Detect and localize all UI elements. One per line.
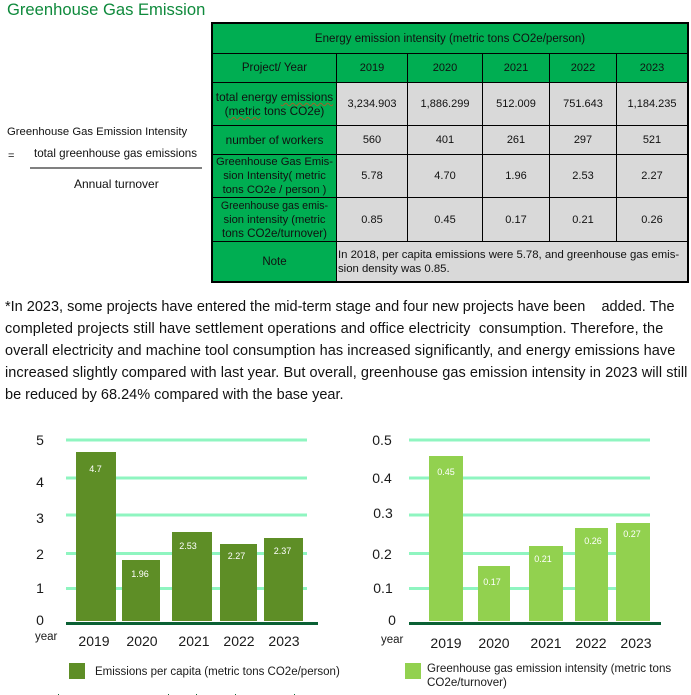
bar chart: emission intensity (372, 432, 671, 689)
y axis labels (372, 432, 396, 628)
emissions table (211, 22, 689, 283)
row: number of workers: 297 (574, 134, 592, 146)
bar value labels: 0.26 (584, 536, 602, 546)
row: total energy emissions: 1,886.299 (421, 98, 469, 110)
header row: 2023 (640, 62, 664, 74)
row: intensity per turnover: sion intensity (metric (224, 214, 325, 226)
row: total energy emissions: 751.643 (563, 98, 603, 110)
bar value labels: 2.37 (274, 546, 291, 556)
legend: Emissions per capita (metric tons CO2e/person) (95, 666, 340, 678)
y axis labels: 3 (36, 510, 44, 526)
title: Greenhouse Gas Emission (7, 0, 205, 19)
bar chart: emissions per capita (35, 432, 340, 695)
explanatory paragraph: increased slightly compared with last year. But overall, greenhouse gas emission intensity in 2023 will still (5, 365, 687, 381)
bar value labels: 4.7 (89, 464, 102, 474)
row: number of workers: 521 (643, 134, 661, 146)
denominator: Annual turnover (74, 177, 159, 191)
row: note (213, 242, 687, 281)
formula label: Greenhouse Gas Emission Intensity (7, 126, 187, 138)
gridlines (66, 438, 307, 590)
row: number of workers: 261 (507, 134, 525, 146)
formula (7, 126, 202, 191)
row: intensity per person: 1.96 (505, 170, 527, 182)
row: note: In 2018, per capita emissions were 5.78, and greenhouse gas emis- (338, 248, 679, 260)
x axis labels: 2019 (78, 633, 110, 649)
x axis labels: 2023 (268, 633, 300, 649)
row: number of workers: 560 (363, 134, 381, 146)
y axis labels: 5 (36, 432, 44, 448)
row: intensity per person: 2.53 (572, 170, 594, 182)
bars (76, 452, 303, 621)
x axis labels: 2023 (620, 635, 652, 651)
bar value labels: 0.21 (534, 554, 552, 564)
gridlines (409, 438, 650, 590)
row: intensity per turnover: 0.17 (505, 214, 527, 226)
bar value labels: 2.53 (179, 541, 197, 551)
row: intensity per turnover: tons CO2e/turnover) (222, 226, 327, 240)
row: intensity per turnover: 0.85 (361, 214, 383, 226)
header row: Project/ Year (242, 62, 307, 74)
y axis labels (36, 432, 44, 628)
row: total energy emissions: 1,184.235 (628, 98, 676, 110)
x axis labels (430, 635, 652, 651)
x axis labels: 2021 (178, 633, 210, 649)
header row: 2022 (571, 62, 595, 74)
row: intensity per turnover: 0.26 (641, 214, 663, 226)
equals sign: = (8, 150, 14, 162)
x axis labels: 2021 (530, 635, 562, 651)
y axis labels: 0.5 (372, 432, 392, 448)
year label: year (35, 631, 58, 643)
y axis labels: 0.1 (373, 580, 393, 596)
row: total energy emissions: 3,234.903 (348, 98, 396, 110)
explanatory paragraph: *In 2023, some projects have entered the mid-term stage and four new projects have been added. The (5, 299, 675, 315)
x axis labels: 2019 (430, 635, 462, 651)
legend (405, 662, 671, 689)
legend: CO2e/turnover) (427, 676, 507, 689)
row: total energy emissions: total energy emissions (216, 90, 333, 104)
row: intensity per person (213, 155, 687, 197)
y axis labels: 2 (36, 546, 44, 562)
row: intensity per turnover: Greenhouse gas emis- (221, 200, 328, 212)
legend (69, 663, 340, 679)
row: intensity per turnover (213, 198, 687, 241)
row: total energy emissions: (metric tons CO2e) (225, 104, 324, 118)
table title: Energy emission intensity (metric tons CO2e/person) (315, 32, 585, 44)
row: intensity per turnover: 0.45 (434, 214, 456, 226)
x axis labels: 2020 (126, 633, 158, 649)
row: intensity per person: tons CO2e / person ) (223, 184, 326, 196)
row: intensity per person: 4.70 (434, 170, 456, 182)
row: total energy emissions (213, 83, 687, 125)
row: number of workers: number of workers (226, 133, 323, 147)
y axis labels: 0.4 (372, 470, 392, 486)
year label: year (381, 634, 404, 646)
bar value labels: 2.27 (228, 551, 245, 561)
bar value labels: 0.27 (623, 529, 641, 539)
row: intensity per turnover: 0.21 (572, 214, 594, 226)
explanatory paragraph (5, 299, 687, 403)
y axis labels: 0 (36, 612, 44, 628)
x axis baseline (66, 622, 318, 625)
header row: 2020 (433, 62, 457, 74)
row: number of workers (213, 126, 687, 154)
y axis labels: 4 (36, 474, 44, 490)
x axis labels: 2022 (575, 635, 607, 651)
row: note: sion density was 0.85. (338, 262, 450, 274)
numerator: total greenhouse gas emissions (34, 147, 197, 160)
legend: Greenhouse gas emission intensity (metric tons (427, 662, 671, 675)
bar value labels: 0.17 (483, 577, 501, 587)
explanatory paragraph: completed projects still have settlement operations and office electricity consumption. Therefore, the (5, 321, 663, 337)
y axis labels: 0 (388, 612, 396, 628)
row: number of workers: 401 (436, 134, 454, 146)
bars (429, 456, 650, 621)
header row (213, 54, 687, 82)
x axis labels: 2020 (478, 635, 510, 651)
explanatory paragraph: overall electricity and machine tool consumption has increased significantly, and energy emissions have (5, 343, 675, 359)
y axis labels: 0.2 (372, 546, 392, 562)
bar value labels (437, 467, 641, 587)
row: intensity per person: 2.27 (641, 170, 663, 182)
y axis labels: 1 (36, 580, 44, 596)
row: total energy emissions: 512.009 (496, 98, 536, 110)
row: intensity per person: Greenhouse Gas Emis- (216, 156, 333, 168)
header row: 2021 (504, 62, 528, 74)
bar value labels: 1.96 (131, 569, 149, 579)
row: intensity per person: sion Intensity( metric (223, 170, 326, 182)
fraction bar (30, 167, 202, 169)
row: note: Note (262, 256, 287, 268)
x axis labels: 2022 (223, 633, 255, 649)
x axis labels (78, 633, 300, 649)
explanatory paragraph: be reduced by 68.24% compared with the base year. (5, 387, 344, 403)
x axis baseline (409, 622, 661, 625)
row: intensity per person: 5.78 (361, 170, 383, 182)
table title (213, 24, 687, 53)
bar value labels (89, 464, 291, 579)
bar value labels: 0.45 (437, 467, 455, 477)
y axis labels: 0.3 (373, 505, 393, 521)
header row: 2019 (360, 62, 384, 74)
